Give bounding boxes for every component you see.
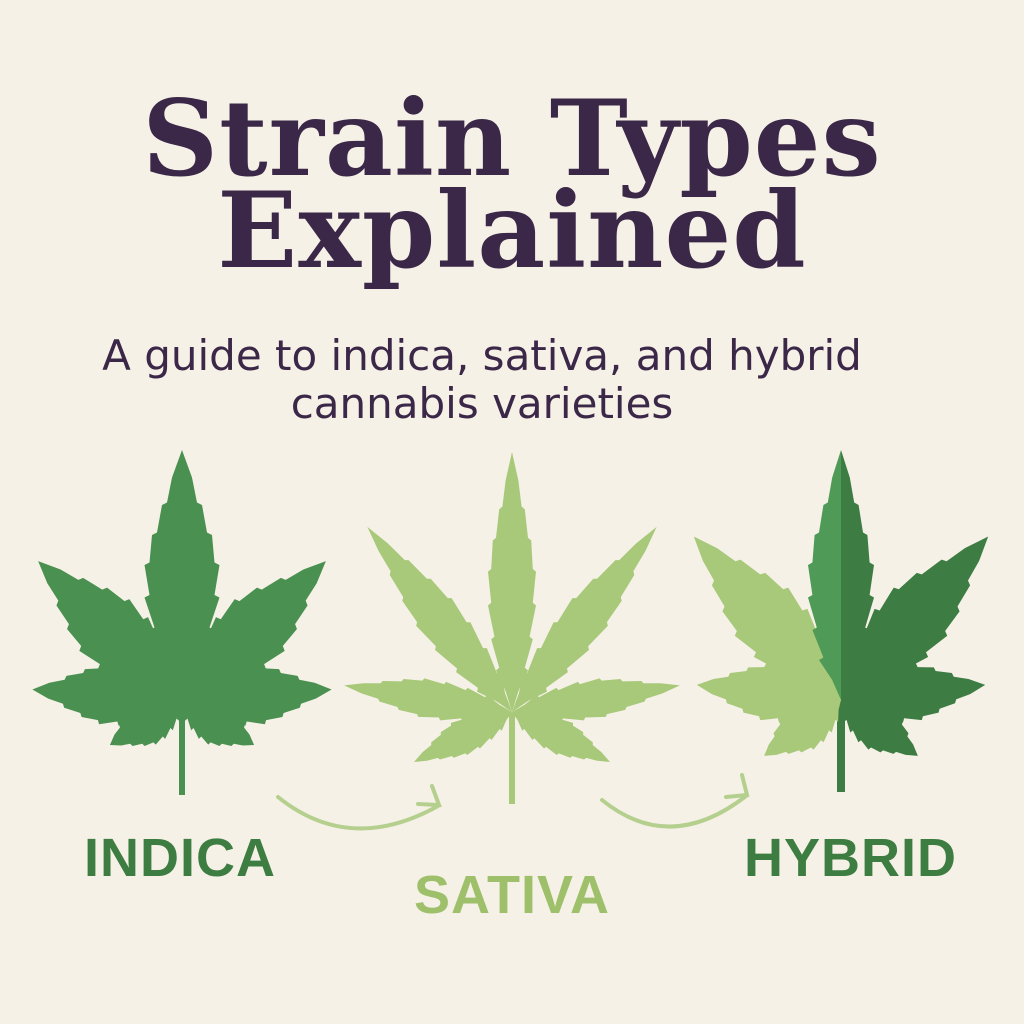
label: hybrid: HYBRID	[744, 828, 957, 888]
subtitle	[102, 331, 862, 428]
subtitle: A guide to indica, sativa, and hybrid	[102, 331, 862, 380]
title: Explained	[217, 168, 807, 292]
arrow: indica to sativa	[278, 786, 439, 828]
arrow: sativa to hybrid	[602, 775, 747, 827]
label: indica: INDICA	[84, 828, 276, 888]
leaf: indica	[13, 450, 351, 795]
label: sativa: SATIVA	[414, 865, 610, 925]
title: Strain Types	[142, 76, 882, 200]
leaf: sativa	[341, 452, 683, 804]
leaf: hybrid	[667, 450, 1015, 792]
subtitle: cannabis varieties	[291, 379, 673, 428]
title	[142, 76, 882, 292]
